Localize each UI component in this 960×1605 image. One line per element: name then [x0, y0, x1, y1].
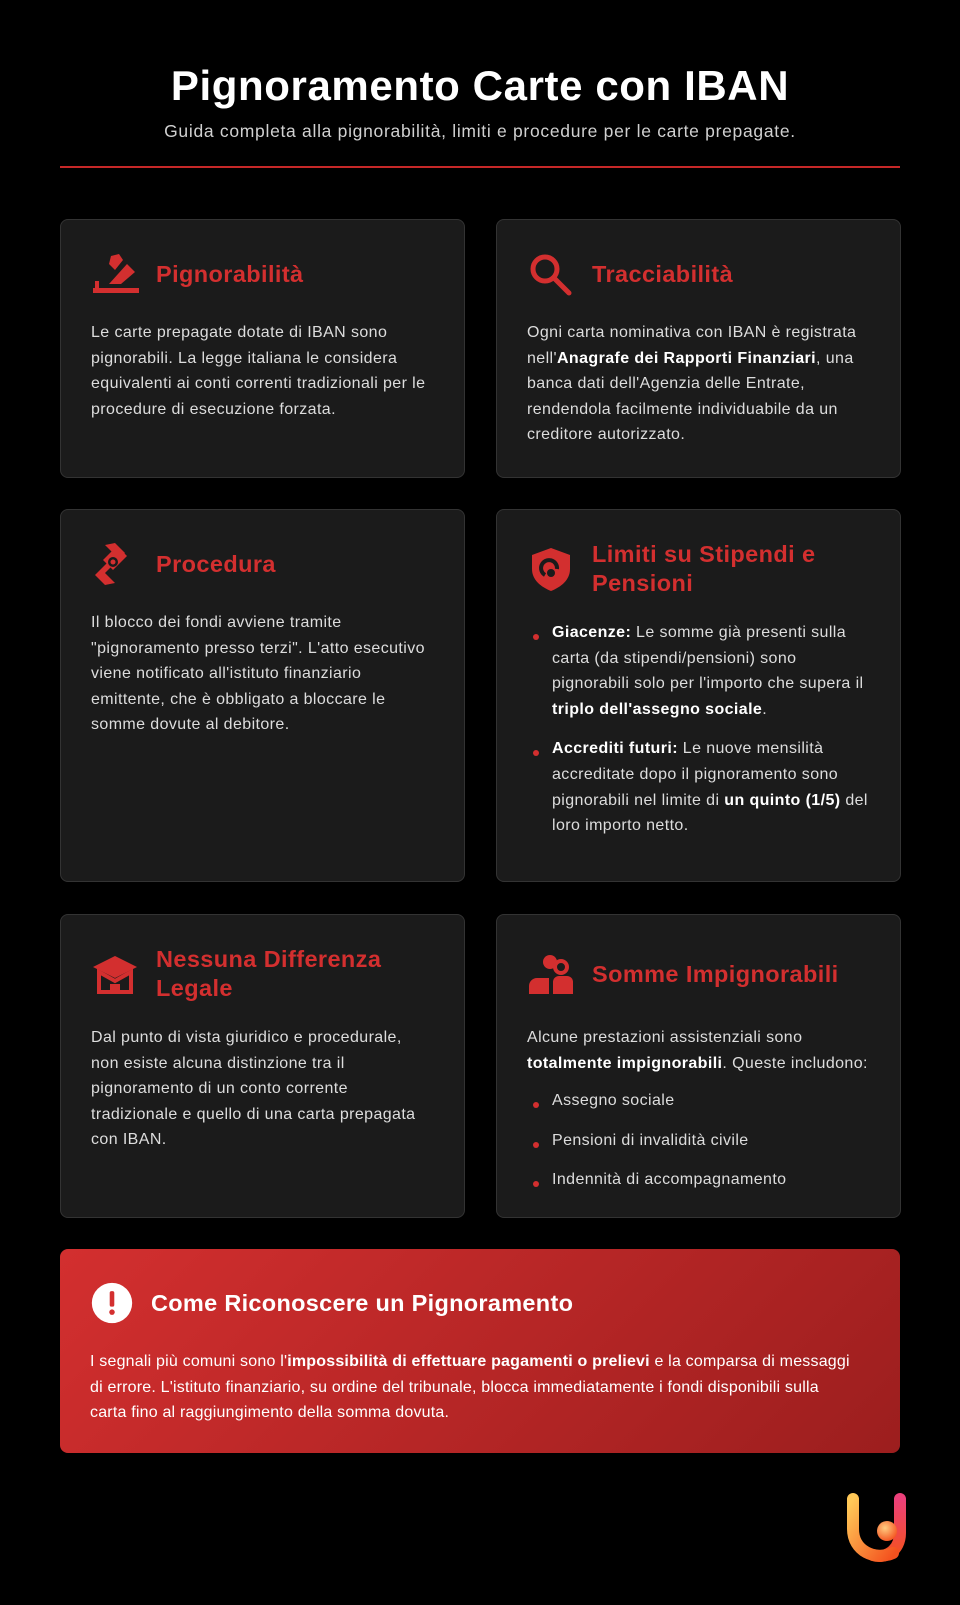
- subtitle: Guida completa alla pignorabilità, limiti e procedure per le carte prepagate.: [164, 121, 796, 141]
- heading: tracciabilità: [530, 254, 733, 296]
- bullet list: [533, 624, 868, 834]
- heading: somme impignorabili: [529, 955, 839, 994]
- callout: come riconoscere: [60, 1249, 900, 1453]
- bullet list: Giacenze: Le somme già presenti sulla carta (da stipendi/pensioni) sono pignorabili solo per l'importo che supera il triplo dell'assegno sociale.: [552, 624, 863, 718]
- panel: somme impignorabili: [496, 914, 901, 1218]
- bullet list: Pensioni di invalidità civile: [552, 1132, 749, 1149]
- bullet list: Assegno sociale: [552, 1092, 675, 1109]
- heading: callout: [92, 1282, 573, 1324]
- heading: procedura: [95, 543, 276, 585]
- panel: procedura: [60, 509, 465, 882]
- heading: pignorabilità: [93, 254, 304, 293]
- text: Il blocco dei fondi avviene tramite "pignoramento presso terzi". L'atto esecutivo viene notificato all'istituto finanziario emittente, che è obbligato a bloccare le somme dovute al debitore.: [91, 614, 425, 733]
- text: Ogni carta nominativa con IBAN è registrata nell'Anagrafe dei Rapporti Finanziari, una banca dati dell'Agenzia delle Entrate, rendendola facilmente individuabile da un creditore autorizzato.: [527, 324, 856, 443]
- heading: somme impignorabili: Somme Impignorabili: [592, 960, 839, 986]
- bullet list: [533, 1092, 786, 1188]
- text: Le carte prepagate dotate di IBAN sono pignorabili. La legge italiana le considera equivalenti ai conti correnti tradizionali per le procedure di esecuzione forzata.: [91, 324, 425, 418]
- panel: tracciabilità: [496, 219, 901, 478]
- text: Dal punto di vista giuridico e procedurale, non esiste alcuna distinzione tra il pignoramento di un conto corrente tradizionale e quello di una carta prepagata con IBAN.: [91, 1029, 415, 1148]
- text: I segnali più comuni sono l'impossibilità di effettuare pagamenti o prelievi e la comparsa di messaggi: [90, 1353, 850, 1370]
- bullet list: Accrediti futuri: Le nuove mensilità accreditate dopo il pignoramento sono pignorabili nel limite di un quinto (1/5) del loro importo netto.: [552, 740, 868, 834]
- panel: limiti: [496, 509, 901, 882]
- text: [90, 1353, 850, 1421]
- heading: procedura: Procedura: [156, 550, 276, 576]
- heading: callout: Come Riconoscere un Pignoramento: [151, 1290, 573, 1316]
- text: di errore. L'istituto finanziario, su ordine del tribunale, blocca immediatamente i fondi disponibili sulla: [90, 1379, 819, 1396]
- heading: pignorabilità: Pignorabilità: [156, 260, 304, 286]
- heading: tracciabilità: Tracciabilità: [592, 260, 733, 286]
- text: carta fino al raggiungimento della somma dovuta.: [90, 1404, 449, 1421]
- panel: pignorabilità: [60, 219, 465, 478]
- panel: nessuna differenza: [60, 914, 465, 1218]
- heading: nessuna differenza: Nessuna Differenza Legale: [156, 946, 381, 1001]
- logo: [847, 1493, 906, 1562]
- bullet list: Indennità di accompagnamento: [552, 1171, 786, 1188]
- heading: limiti: Limiti su Stipendi e Pensioni: [592, 541, 815, 596]
- text: Alcune prestazioni assistenziali sono totalmente impignorabili. Queste includono:: [527, 1029, 868, 1072]
- title: Pignoramento Carte con IBAN: [171, 62, 789, 109]
